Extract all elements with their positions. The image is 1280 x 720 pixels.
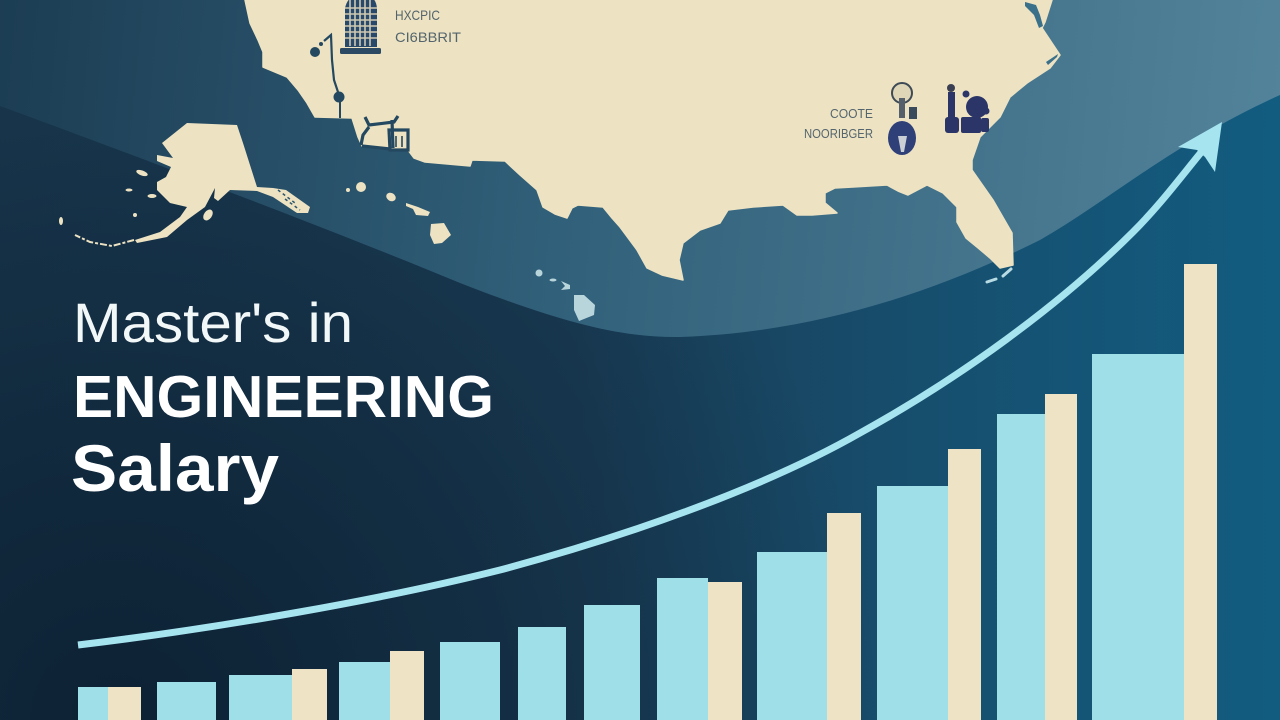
label: lower city: COOTE (830, 106, 873, 121)
Aleutian islands (75, 235, 134, 246)
label: upper city: HXCPIC (395, 7, 440, 23)
Alaskan islands (59, 169, 215, 225)
icon: group of people (945, 84, 990, 133)
label: lower city: NOORIBGER (804, 126, 873, 141)
southeast Alaska detail (278, 190, 300, 210)
mainland (245, 0, 1060, 280)
growth arrow (78, 122, 1222, 645)
map of the United States (59, 0, 1060, 321)
first Hawaiian chain (346, 182, 451, 244)
label: upper city (395, 7, 461, 45)
arrow shaft (78, 150, 1203, 645)
sound inlet (1046, 54, 1058, 65)
arrow head (1178, 122, 1222, 172)
title line: Master's in: Master's in (73, 291, 353, 354)
title line: ENGINEERING: ENGINEERING (73, 364, 494, 430)
title (71, 291, 494, 505)
blue bars (78, 354, 1184, 720)
cream bars (108, 264, 1217, 720)
Florida keys (987, 269, 1011, 282)
icon: light bulb and money bag (888, 83, 917, 155)
label: upper city: CI6BBRIT (395, 29, 461, 45)
second Hawaiian chain (536, 270, 595, 321)
title line: Salary: Salary (71, 431, 279, 505)
Alaska (135, 123, 310, 243)
bar chart (78, 264, 1217, 720)
icon: tower building (340, 0, 381, 54)
icon: antenna and palm (310, 35, 344, 118)
bay inlet (1025, 2, 1043, 28)
icon: bridge and gate (361, 116, 408, 150)
label: lower city (804, 106, 873, 141)
